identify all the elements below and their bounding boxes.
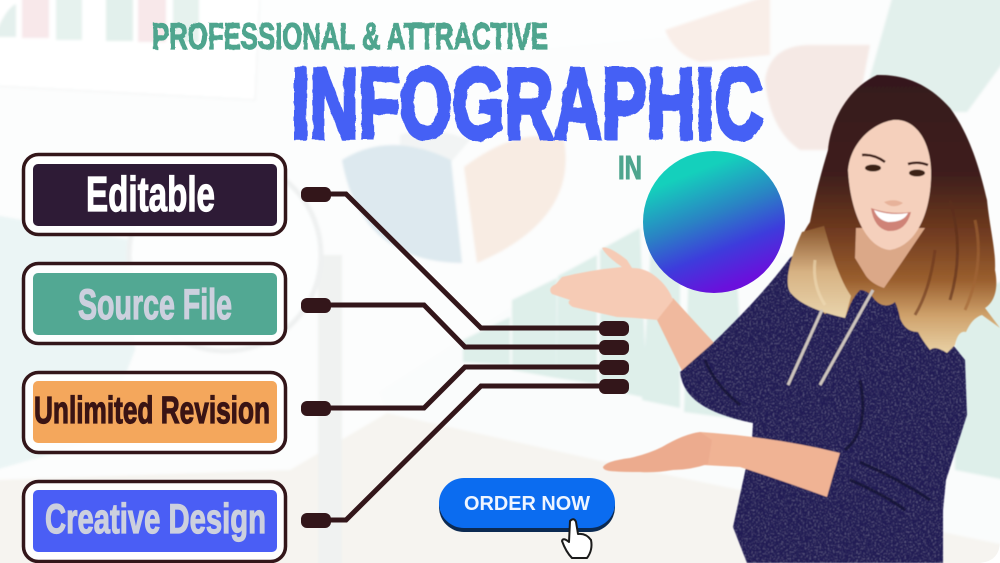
order now button bbox=[439, 478, 615, 532]
raised forearm bbox=[657, 298, 716, 375]
mouth bbox=[871, 208, 911, 231]
title: infographic: INFOGRAPHIC bbox=[291, 48, 763, 160]
feature box: unlimited revision: Unlimited Revision bbox=[34, 390, 270, 432]
feature box: source file: Source File bbox=[78, 281, 232, 329]
blond lock left bbox=[788, 226, 851, 318]
eyebrows bbox=[862, 155, 928, 165]
feature box: editable bbox=[24, 154, 286, 234]
feature box: creative design bbox=[24, 482, 286, 562]
sweater folds bbox=[705, 360, 930, 510]
raised hand bbox=[550, 248, 673, 320]
lower forearm bbox=[700, 432, 840, 497]
hair silhouette bbox=[788, 75, 1000, 353]
eyes bbox=[865, 164, 925, 176]
icon: pointing hand cursor bbox=[562, 519, 592, 558]
lower hand bbox=[603, 432, 712, 472]
feature box: source file bbox=[24, 264, 286, 344]
photo: woman presenting bbox=[550, 75, 1000, 563]
sweater bbox=[680, 250, 967, 563]
label: in: IN bbox=[618, 149, 642, 186]
gradient circle bbox=[643, 151, 785, 293]
face bbox=[848, 120, 931, 250]
heading: professional and attractive: PROFESSIONAL & ATTRACTIVE bbox=[152, 16, 548, 57]
order now button: ORDER NOW bbox=[464, 493, 590, 515]
hair strands bbox=[814, 200, 978, 315]
neck bbox=[855, 228, 925, 288]
hoodie strings bbox=[788, 290, 873, 385]
feature box: unlimited revision bbox=[24, 372, 286, 452]
nose shadow bbox=[884, 200, 903, 206]
feature box: editable: Editable bbox=[86, 168, 215, 222]
connector lines bbox=[301, 187, 629, 528]
feature box: creative design: Creative Design bbox=[45, 495, 266, 542]
white rounded corner bbox=[980, 541, 1000, 563]
